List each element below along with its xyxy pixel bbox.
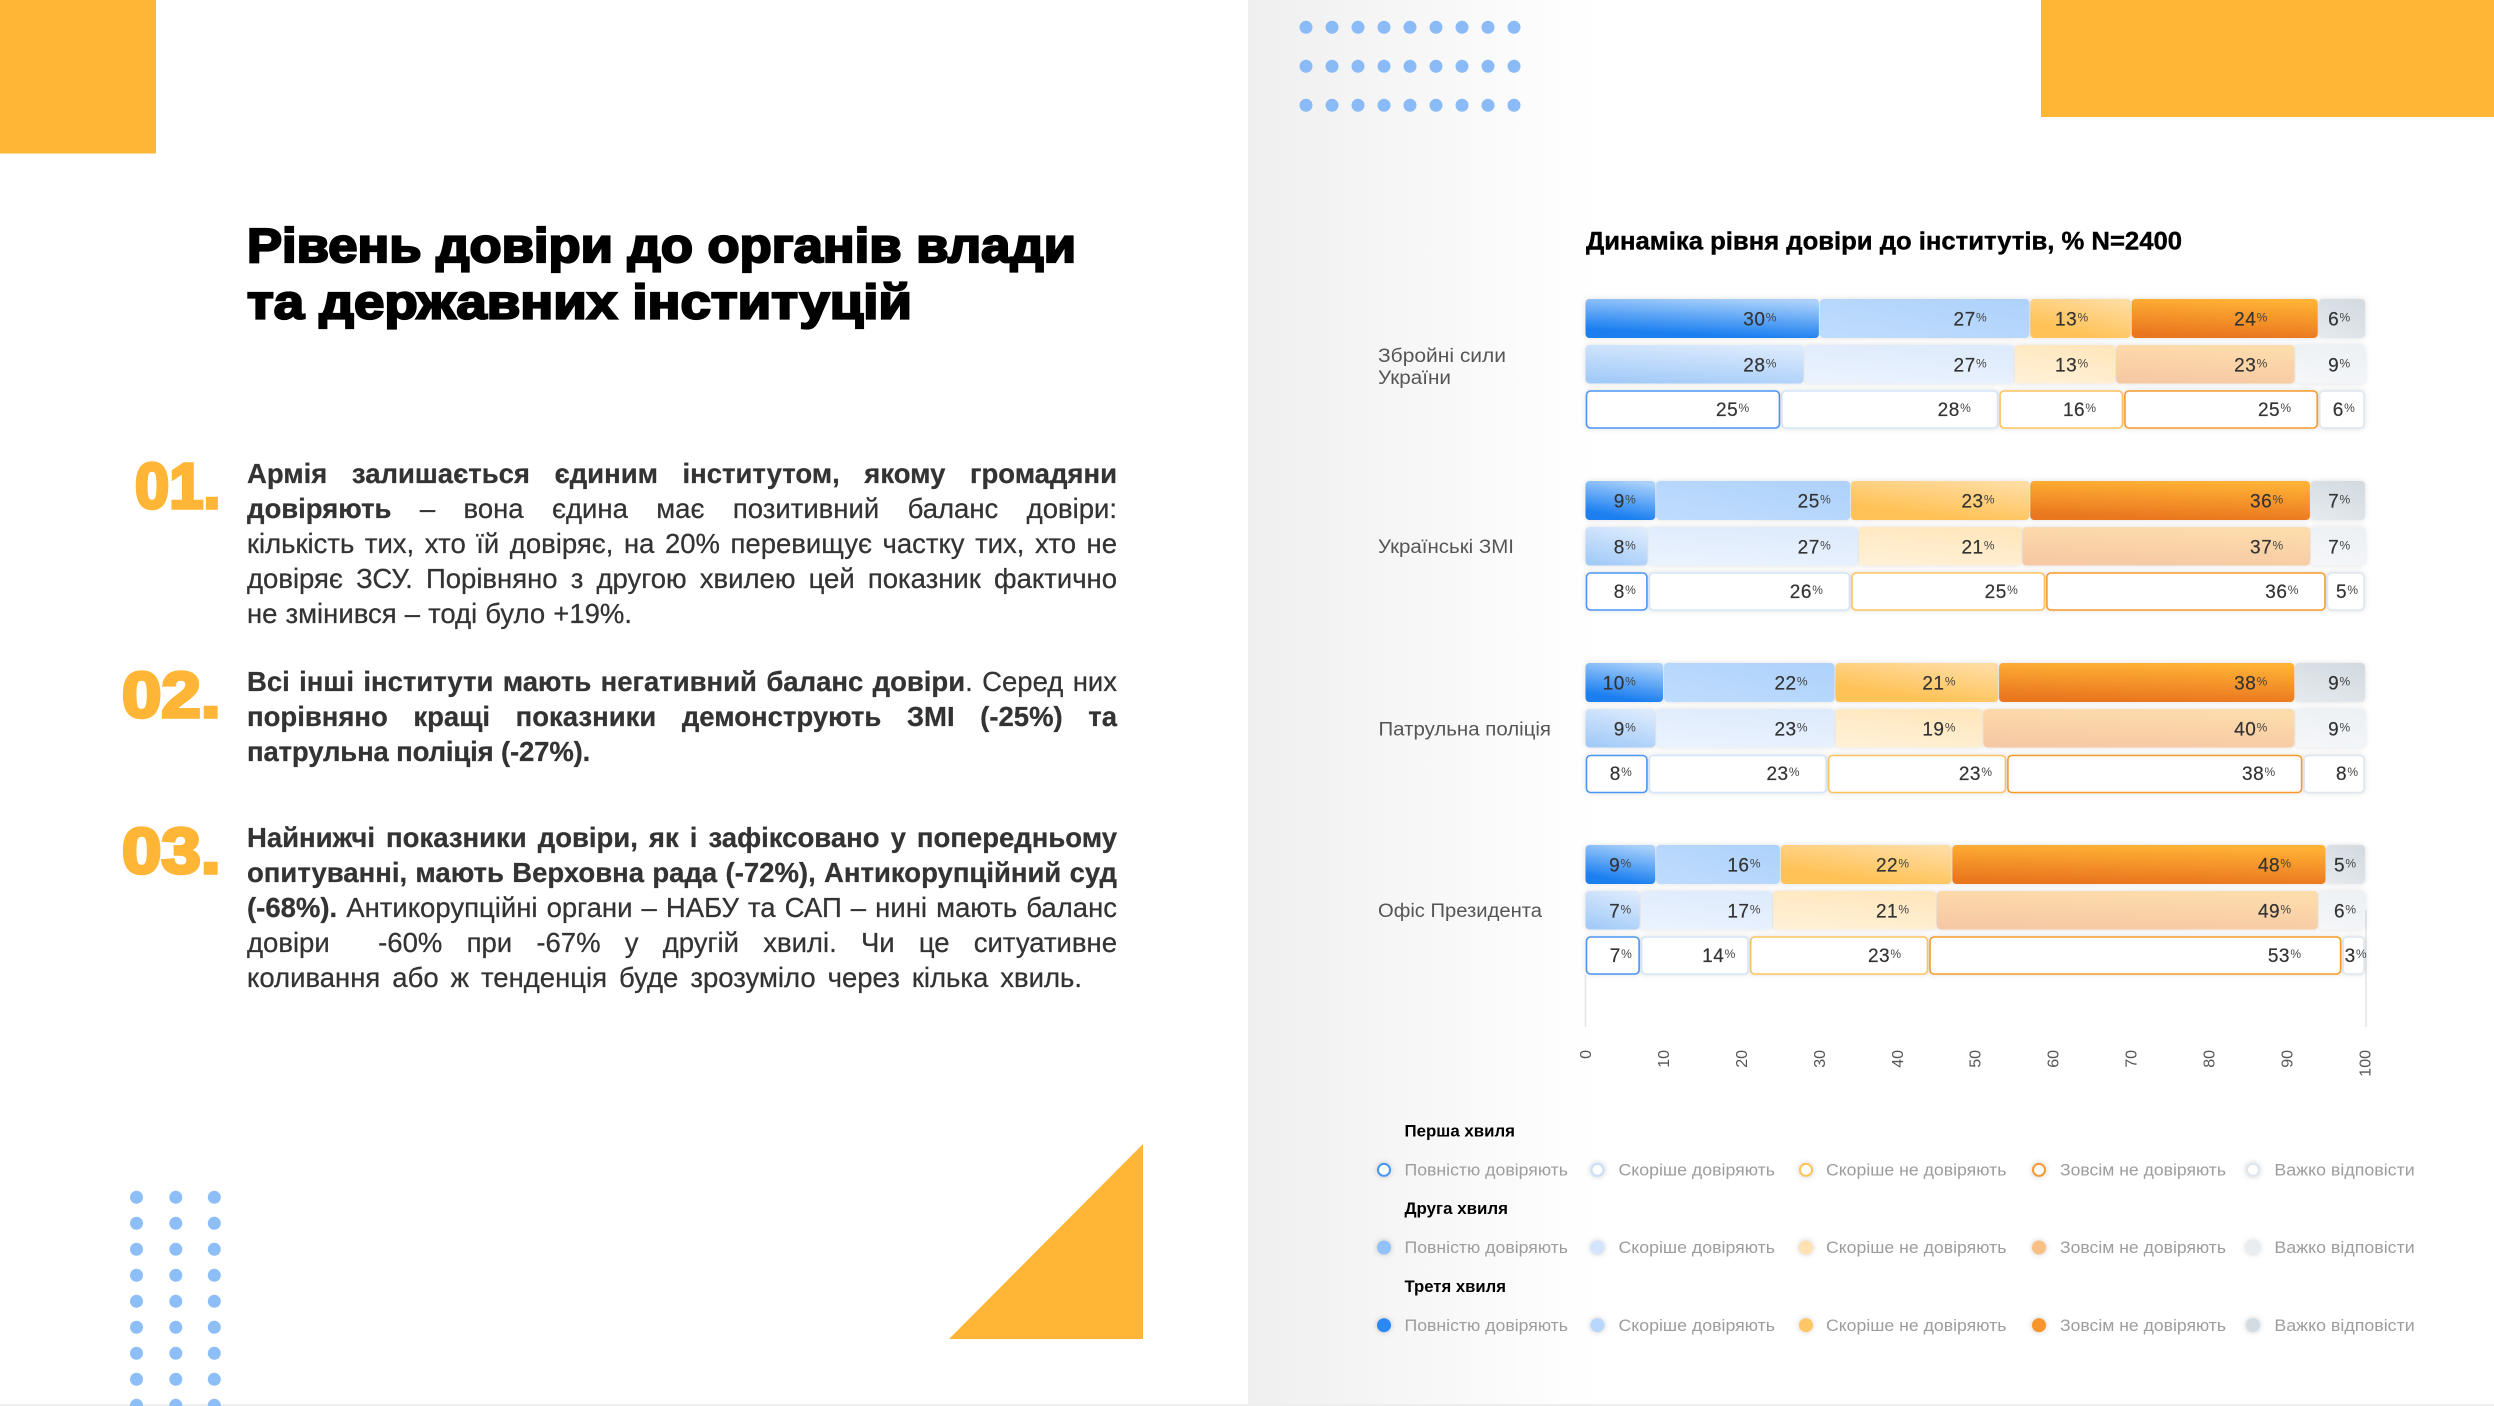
values: перша хвиля: % [1890, 947, 1901, 961]
legend: друга хвиля: Зовсім не довіряють [2060, 1239, 2226, 1257]
values: перша хвиля: % [1625, 583, 1636, 597]
values: третя хвиля: % [1750, 856, 1761, 870]
row: друга хвиля [1586, 345, 2365, 384]
bottom strip [0, 1404, 2494, 1406]
values: перша хвиля [1610, 946, 2367, 967]
values: друга хвиля: % [2340, 538, 2351, 552]
axis tick labels: 30 [1812, 1050, 1829, 1068]
text block 01: не змінився – тоді було +19%. [247, 598, 632, 628]
values: перша хвиля: % [2280, 401, 2291, 415]
values: друга хвиля: 21 [1961, 538, 1984, 558]
values: третя хвиля: % [2280, 856, 2291, 870]
axis tick labels [1578, 1050, 2374, 1077]
axis lines [1586, 910, 2366, 1027]
values: перша хвиля: 28 [1938, 400, 1960, 421]
values: третя хвиля [1743, 310, 2351, 330]
values: перша хвиля: 6 [2333, 400, 2344, 421]
row: перша хвиля [1586, 573, 2364, 610]
values: перша хвиля [1716, 400, 2355, 421]
values: третя хвиля: 48 [2258, 856, 2280, 876]
values: друга хвиля: 6 [2334, 902, 2345, 922]
legend: перша хвиля: Важко відповісти [2274, 1162, 2415, 1180]
values: друга хвиля: 8 [1614, 538, 1625, 558]
legend: третя хвиля: Скоріше довіряють [1618, 1317, 1775, 1335]
values: перша хвиля: % [1725, 947, 1736, 961]
values: друга хвиля: % [1976, 356, 1987, 370]
values: друга хвиля: % [1945, 720, 1956, 734]
axis tick labels: 0 [1578, 1050, 1595, 1059]
text block 03: (-68%). Антикорупційні органи – НАБУ та САП – нині мають баланс [247, 892, 1117, 922]
text block 01: Армія залишається єдиним інститутом, якому громадяни [247, 458, 1117, 488]
text block 01: кількість тих, хто їй довіряє, на 20% перевищує частку тих, хто не [247, 528, 1117, 558]
values: третя хвиля: 13 [2055, 310, 2077, 330]
row: друга хвиля [1586, 709, 2365, 748]
text block 01: довіряє ЗСУ. Порівняно з другою хвилею цей показник фактично [247, 562, 1117, 594]
legend: друга хвиля: Друга хвиля [1404, 1200, 1508, 1218]
values: перша хвиля: 16 [2063, 400, 2085, 421]
values: третя хвиля: % [2345, 856, 2356, 870]
legend: третя хвиля: Скоріше не довіряють [1826, 1317, 2006, 1335]
values: друга хвиля: % [2280, 902, 2291, 916]
axis tick labels: 50 [1968, 1050, 1985, 1068]
values: перша хвиля: % [1960, 401, 1971, 415]
row: третя хвиля [1586, 663, 2365, 702]
values: перша хвиля: 7 [1610, 946, 1621, 967]
legend: перша хвиля: Зовсім не довіряють [2060, 1162, 2226, 1180]
chart title: Динаміка рівня довіри до інститутів, % N=2400 [1586, 228, 2182, 256]
values: перша хвиля: % [2265, 765, 2276, 779]
values: друга хвиля: 37 [2250, 538, 2272, 558]
values: перша хвиля: 8 [2336, 764, 2347, 785]
text block 03: опитуванні, мають Верховна рада (-72%), Антикорупційний суд [247, 856, 1117, 888]
values: друга хвиля: % [1621, 902, 1632, 916]
axis tick labels: 70 [2124, 1050, 2141, 1068]
values: третя хвиля: 27 [1954, 310, 1976, 330]
values: третя хвиля: 9 [1614, 492, 1625, 512]
values: друга хвиля: % [1625, 720, 1636, 734]
values: друга хвиля [1614, 720, 2351, 740]
values: третя хвиля: % [2340, 492, 2351, 506]
legend: друга хвиля: Важко відповісти [2274, 1239, 2415, 1257]
values: третя хвиля: % [1766, 310, 1777, 324]
values: перша хвиля: % [2347, 765, 2358, 779]
orange rectangle top left [0, 0, 156, 154]
legend: третя хвиля: Зовсім не довіряють [2060, 1317, 2226, 1335]
values: третя хвиля: % [1945, 674, 1956, 688]
chart group: Збройні сили України [1378, 299, 2365, 428]
values: третя хвиля: 22 [1876, 856, 1898, 876]
axis tick labels: 20 [1734, 1050, 1751, 1068]
values: третя хвиля: % [1976, 310, 1987, 324]
values: перша хвиля [1614, 582, 2358, 603]
text block 01: довіряють – вона єдина має позитивний баланс довіри: [247, 492, 1117, 524]
values: друга хвиля: % [1984, 538, 1995, 552]
row: третя хвиля [1586, 845, 2365, 884]
values: перша хвиля: 14 [1702, 946, 1724, 967]
values: третя хвиля: % [1898, 856, 1909, 870]
values: друга хвиля: % [1766, 356, 1777, 370]
axis tick labels: 40 [1890, 1050, 1907, 1068]
values: друга хвиля [1609, 902, 2356, 922]
axis tick labels: 10 [1656, 1050, 1673, 1068]
text block 01 [247, 458, 1117, 630]
values: третя хвиля: % [1625, 492, 1636, 506]
values: друга хвиля: % [1625, 538, 1636, 552]
values: третя хвиля: 22 [1774, 674, 1797, 694]
values: друга хвиля: % [1797, 720, 1808, 734]
axis tick labels: 100 [2358, 1050, 2374, 1077]
values: перша хвиля [1610, 764, 2358, 785]
row: перша хвиля [1586, 756, 2364, 792]
dot pattern bottom left [130, 1191, 221, 1406]
right panel background [1248, 0, 2494, 1406]
values: третя хвиля [1609, 856, 2356, 876]
values: перша хвиля: % [2085, 401, 2096, 415]
values: друга хвиля: % [2273, 538, 2284, 552]
category label: України [1378, 368, 1451, 389]
values: перша хвиля: 38 [2242, 764, 2264, 785]
category label [1378, 346, 1506, 389]
text block 02: патрульна поліція (-27%). [247, 736, 590, 766]
text block 02 [247, 666, 1118, 768]
values: друга хвиля: 23 [2234, 356, 2256, 376]
values: третя хвиля: 16 [1727, 856, 1750, 876]
values: третя хвиля: 5 [2334, 856, 2345, 876]
values: перша хвиля: 36 [2265, 582, 2287, 603]
values: перша хвиля: % [2344, 401, 2355, 415]
values: третя хвиля: % [1625, 674, 1636, 688]
values: друга хвиля: % [2257, 720, 2268, 734]
values: перша хвиля: % [1789, 765, 1800, 779]
values: друга хвиля: 19 [1922, 720, 1944, 740]
values: третя хвиля: 36 [2250, 492, 2272, 512]
text block 03: довіри -60% при -67% у другій хвилі. Чи це ситуативне [247, 926, 1117, 958]
legend: перша хвиля: Перша хвиля [1404, 1123, 1515, 1141]
dot pattern top [1300, 21, 1520, 112]
category label: Збройні сили [1378, 346, 1506, 367]
values: перша хвиля: 25 [1985, 582, 2007, 603]
values: друга хвиля: 27 [1954, 356, 1976, 376]
values: третя хвиля: 10 [1603, 674, 1625, 694]
values: третя хвиля: % [2340, 674, 2351, 688]
text block 02: порівняно кращі показники демонструють ЗМІ (-25%) та [247, 700, 1117, 732]
values: третя хвиля: 9 [2328, 674, 2339, 694]
legend: третя хвиля: Повністю довіряють [1404, 1317, 1568, 1335]
values: третя хвиля [1603, 674, 2351, 694]
values: друга хвиля: % [1898, 902, 1909, 916]
values: третя хвиля [1614, 492, 2351, 512]
number 03: 03. [122, 815, 220, 887]
category label: Офіс Президента [1378, 901, 1542, 922]
legend: друга хвиля: Скоріше довіряють [1618, 1239, 1775, 1257]
values: перша хвиля: 25 [2258, 400, 2280, 421]
values: перша хвиля: % [1739, 401, 1750, 415]
values: перша хвиля: % [2356, 947, 2367, 961]
values: друга хвиля: % [2345, 902, 2356, 916]
values: перша хвиля: 23 [1868, 946, 1890, 967]
values: перша хвиля: % [2290, 947, 2301, 961]
values: перша хвиля: 23 [1766, 764, 1789, 785]
values: третя хвиля: % [2340, 310, 2351, 324]
axis tick labels: 60 [2046, 1050, 2063, 1068]
legend: перша хвиля [1378, 1123, 2415, 1180]
legend: перша хвиля: Повністю довіряють [1404, 1162, 1568, 1180]
values: третя хвиля: 24 [2234, 310, 2256, 330]
title: та державних інституцій [247, 276, 912, 330]
row: друга хвиля [1586, 891, 2365, 930]
values: друга хвиля: 7 [1609, 902, 1620, 922]
orange rectangle top right [2041, 0, 2494, 117]
values: друга хвиля: 9 [2328, 720, 2339, 740]
values: друга хвиля: 28 [1743, 356, 1765, 376]
values: перша хвиля: % [1812, 583, 1823, 597]
values: друга хвиля: 49 [2258, 902, 2280, 922]
values: третя хвиля: % [1984, 492, 1995, 506]
legend: третя хвиля: Важко відповісти [2274, 1317, 2415, 1335]
values: третя хвиля: 23 [1961, 492, 1984, 512]
values: друга хвиля: % [2257, 356, 2268, 370]
values: перша хвиля: 25 [1716, 400, 1738, 421]
values: друга хвиля [1614, 538, 2351, 558]
values: друга хвиля: 27 [1798, 538, 1820, 558]
row: друга хвиля [1586, 527, 2365, 566]
values: третя хвиля: 30 [1743, 310, 1765, 330]
values: друга хвиля: 17 [1727, 902, 1750, 922]
title: Рівень довіри до органів влади [247, 220, 1076, 273]
values: перша хвиля: % [1621, 765, 1632, 779]
values: третя хвиля: % [2257, 310, 2268, 324]
legend: третя хвиля: Третя хвиля [1404, 1278, 1506, 1296]
chart group: Офіс Президента [1378, 845, 2367, 974]
values: третя хвиля: % [1820, 492, 1831, 506]
orange triangle [949, 1144, 1143, 1339]
values: друга хвиля: 13 [2055, 356, 2077, 376]
values: третя хвиля: 21 [1922, 674, 1944, 694]
values: друга хвиля: % [2078, 356, 2089, 370]
values: перша хвиля: 8 [1610, 764, 1621, 785]
values: перша хвиля: % [1981, 765, 1992, 779]
values: третя хвиля: % [2273, 492, 2284, 506]
values: перша хвиля: % [2288, 583, 2299, 597]
values: перша хвиля: 26 [1790, 582, 1812, 603]
legend: перша хвиля: Скоріше довіряють [1618, 1162, 1775, 1180]
values: друга хвиля: 9 [1614, 720, 1625, 740]
values: третя хвиля: 38 [2234, 674, 2256, 694]
values: перша хвиля: 5 [2336, 582, 2347, 603]
values: третя хвиля: % [2078, 310, 2089, 324]
row: перша хвиля [1586, 937, 2364, 974]
values: перша хвиля: % [2007, 583, 2018, 597]
legend: третя хвиля [1377, 1278, 2415, 1335]
values: третя хвиля: % [1797, 674, 1808, 688]
values: друга хвиля: % [1820, 538, 1831, 552]
values: друга хвиля: 23 [1774, 720, 1797, 740]
values: третя хвиля: 25 [1798, 492, 1820, 512]
number 01: 01. [135, 450, 220, 522]
legend: перша хвиля: Скоріше не довіряють [1826, 1162, 2006, 1180]
text block 03: коливання або ж тенденція буде зрозуміло через кілька хвиль. [247, 962, 1082, 992]
values: друга хвиля: % [1750, 902, 1761, 916]
chart group: Українські ЗМІ [1378, 481, 2365, 610]
values: третя хвиля: % [1621, 856, 1632, 870]
legend [1377, 1123, 2415, 1335]
values: друга хвиля: 7 [2328, 538, 2339, 558]
legend: друга хвиля: Повністю довіряють [1404, 1239, 1568, 1257]
values: друга хвиля: % [2340, 720, 2351, 734]
axis tick labels: 90 [2280, 1050, 2296, 1068]
category label: Українські ЗМІ [1378, 537, 1514, 558]
row: перша хвиля [1586, 391, 2364, 428]
values: третя хвиля: 6 [2328, 310, 2339, 330]
values: перша хвиля: % [2347, 583, 2358, 597]
values: перша хвиля: % [1621, 947, 1632, 961]
category label: Патрульна поліція [1378, 720, 1551, 740]
values: третя хвиля: % [2257, 674, 2268, 688]
values: третя хвиля: 9 [1609, 856, 1620, 876]
values: перша хвиля: 53 [2268, 946, 2290, 967]
chart group: Патрульна поліція [1378, 663, 2365, 792]
number 02: 02. [122, 659, 220, 731]
values: перша хвиля: 3 [2345, 946, 2356, 967]
axis tick labels: 80 [2202, 1050, 2219, 1068]
legend: друга хвиля: Скоріше не довіряють [1826, 1239, 2006, 1257]
values: друга хвиля: 9 [2328, 356, 2339, 376]
row: третя хвиля [1586, 299, 2365, 338]
text block 03 [247, 822, 1117, 994]
values: друга хвиля: % [2340, 356, 2351, 370]
values: друга хвиля: 40 [2234, 720, 2256, 740]
title [247, 220, 1076, 330]
values: третя хвиля: 7 [2328, 492, 2339, 512]
values: друга хвиля: 21 [1876, 902, 1898, 922]
row: третя хвиля [1586, 481, 2365, 520]
values: друга хвиля [1743, 356, 2351, 376]
legend: друга хвиля [1377, 1200, 2415, 1257]
values: перша хвиля: 23 [1959, 764, 1981, 785]
values: перша хвиля: 8 [1614, 582, 1625, 603]
text block 02: Всі інші інститути мають негативний баланс довіри. Серед них [247, 666, 1117, 696]
text block 03: Найнижчі показники довіри, як і зафіксовано у попередньому [247, 822, 1117, 852]
